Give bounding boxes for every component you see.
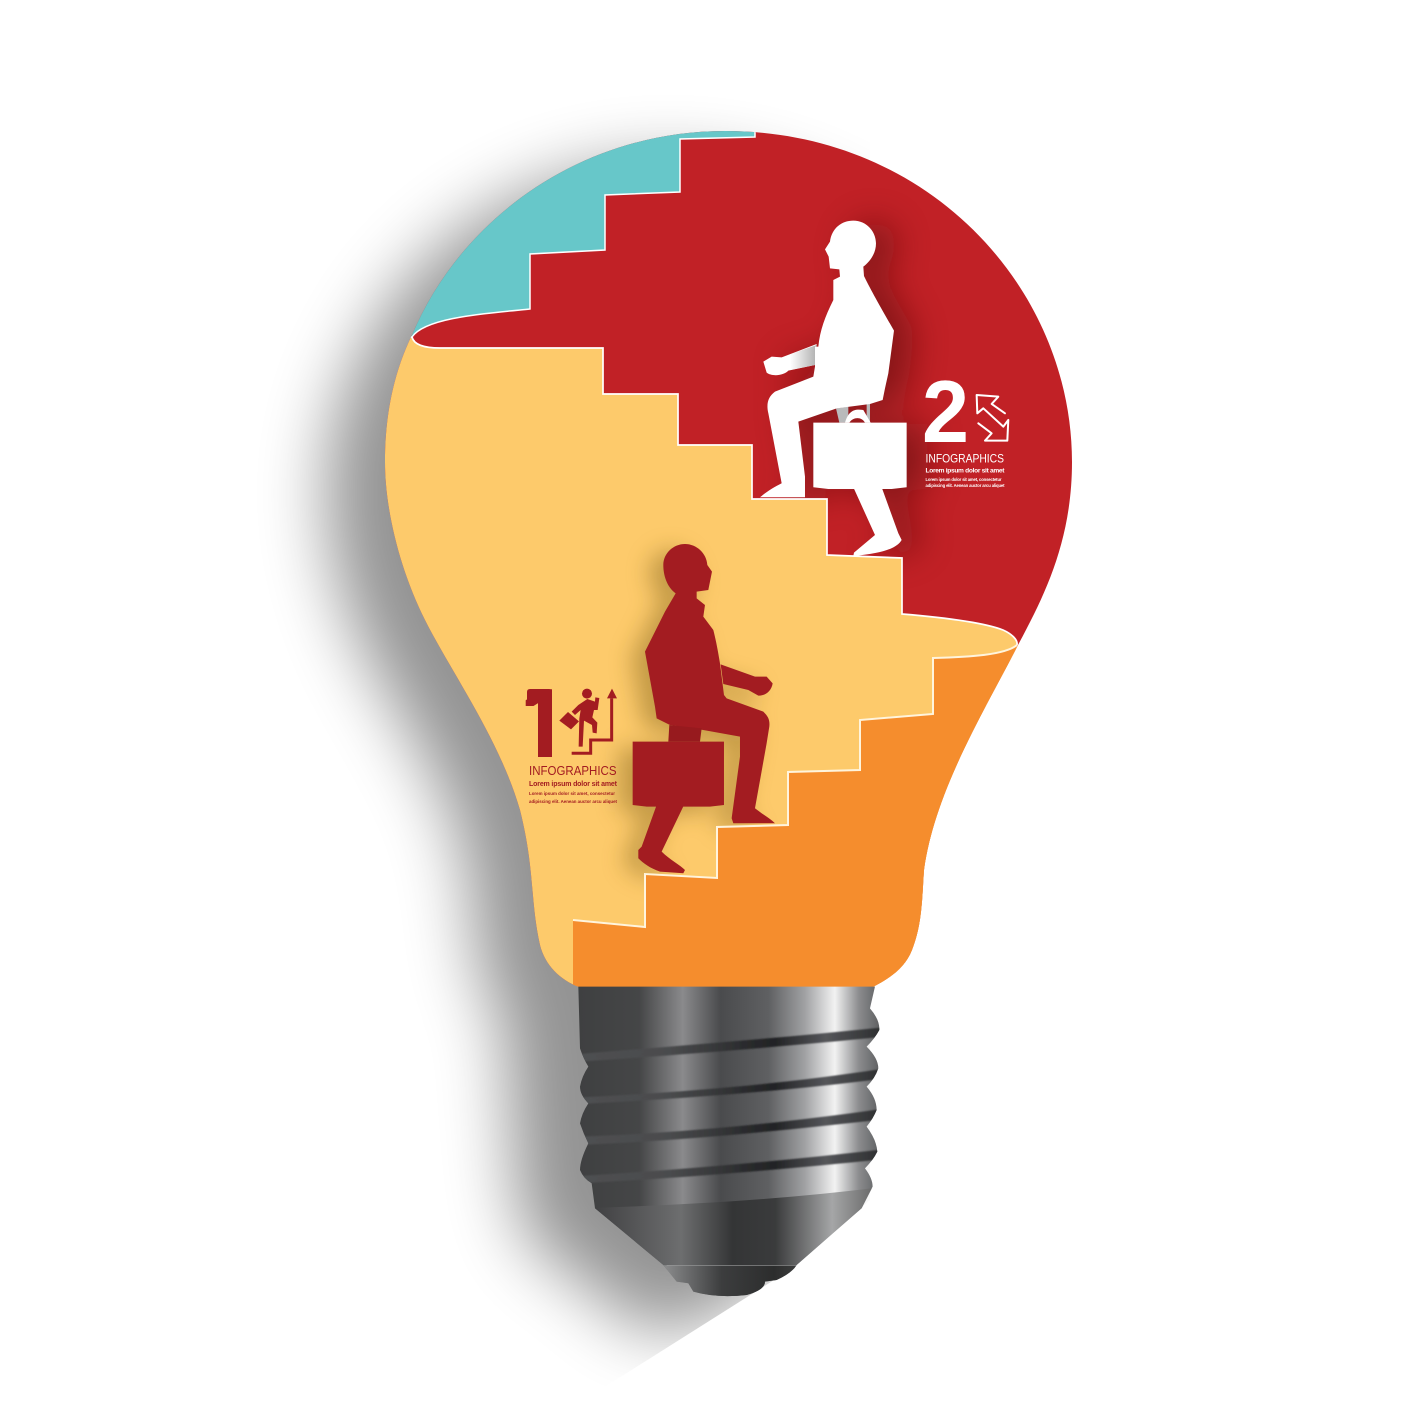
icon: swap arrows bbox=[977, 395, 1008, 441]
handle shade bbox=[836, 403, 870, 423]
shadow of red figure on yellow panel bbox=[619, 550, 761, 879]
number 1: 1 bbox=[519, 668, 574, 778]
infographic: light bulb with stairs bbox=[284, 121, 1072, 1366]
subheading: Lorem ipsum dolor sit amet bbox=[926, 467, 1005, 474]
thread grooves bbox=[580, 1027, 883, 1183]
icon: climbing man with arrow bbox=[559, 689, 617, 753]
contact tip bbox=[664, 1265, 797, 1296]
panel: red bbox=[370, 120, 1090, 1000]
label block 1: adipiscing elit. Aenean auctor arcu aliquet bbox=[529, 799, 618, 804]
figure 2: white businessman bbox=[760, 221, 907, 556]
lower dome bbox=[580, 1187, 880, 1270]
figure 1: red businessman bbox=[633, 544, 775, 873]
bulb screw base bbox=[570, 985, 890, 1305]
heading: INFOGRAPHICS bbox=[529, 763, 617, 778]
body text: Lorem ipsum dolor sit amet, consectetur bbox=[926, 477, 1002, 482]
arm shade bbox=[790, 345, 817, 370]
heading: INFOGRAPHICS bbox=[926, 451, 1004, 465]
orange step highlights bbox=[573, 645, 1017, 927]
label block 1 bbox=[526, 688, 617, 804]
shadow of white figure on red panel bbox=[781, 222, 927, 557]
panel: yellow stairs bbox=[370, 337, 1040, 1000]
metal body bbox=[570, 985, 890, 1305]
subheading: Lorem ipsum dolor sit amet bbox=[529, 781, 618, 788]
bulb glass: coloured paper panels bbox=[370, 110, 1090, 1000]
panel: orange stairs bbox=[573, 640, 1040, 1000]
label block 2 bbox=[922, 362, 1008, 488]
body text: Lorem ipsum dolor sit amet, consectetur bbox=[529, 791, 615, 796]
panel: teal stairs bbox=[410, 131, 756, 338]
label block 2: adipiscing elit. Aenean auctor arcu aliquet bbox=[926, 483, 1005, 488]
number 2: 2 bbox=[922, 362, 969, 461]
drop shadow of the bulb bbox=[327, 165, 1014, 1330]
number 1 stem and flag bbox=[527, 689, 552, 757]
